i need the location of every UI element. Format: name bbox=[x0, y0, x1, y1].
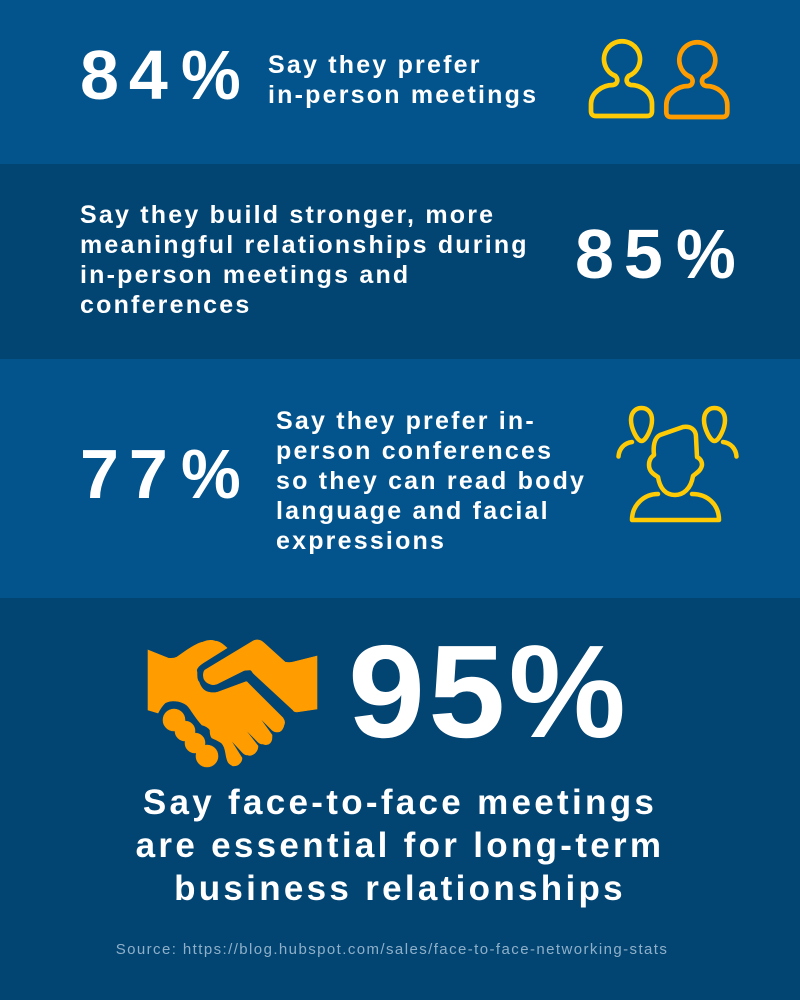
stat number 85% bbox=[575, 215, 736, 293]
icon: person with two others bbox=[616, 406, 739, 522]
text: face-to-face essential: Say face-to-face meetings bbox=[143, 783, 657, 822]
stat number 84%: % bbox=[181, 36, 241, 114]
text: prefer in-person meetings: in-person meetings bbox=[268, 81, 538, 109]
stat number 95% bbox=[348, 618, 626, 765]
text: prefer in-person meetings bbox=[268, 51, 538, 109]
text: stronger relationships bbox=[80, 201, 529, 319]
stat number 95%: 95 bbox=[348, 618, 508, 765]
text: body language: Say they prefer in- bbox=[276, 407, 536, 435]
source note: Source: https://blog.hubspot.com/sales/face-to-face-networking-stats bbox=[116, 941, 668, 958]
stat number 77% bbox=[80, 435, 241, 513]
panel: 95% stat bbox=[0, 598, 800, 1000]
text: stronger relationships: meaningful relationships during bbox=[80, 231, 529, 259]
stat number 84% bbox=[80, 36, 241, 114]
stat number 77%: % bbox=[181, 435, 241, 513]
text: face-to-face essential bbox=[136, 783, 664, 908]
panel: 85% stat bbox=[0, 164, 800, 359]
text: body language: person conferences bbox=[276, 437, 553, 465]
text: body language bbox=[276, 407, 586, 555]
text: stronger relationships: conferences bbox=[80, 291, 252, 319]
text: body language: expressions bbox=[276, 527, 446, 555]
stat number 85%: % bbox=[676, 215, 736, 293]
text: stronger relationships: Say they build stronger, more bbox=[80, 201, 495, 229]
icon: two people bbox=[588, 38, 730, 120]
icon: handshake bbox=[148, 640, 318, 768]
text: face-to-face essential: business relationships bbox=[174, 869, 626, 908]
stat number 84%: 84 bbox=[80, 36, 178, 114]
text: prefer in-person meetings: Say they prefer bbox=[268, 51, 482, 79]
text: body language: so they can read body bbox=[276, 467, 586, 495]
panel: 84% stat bbox=[0, 0, 800, 164]
stat number 85%: 85 bbox=[575, 215, 673, 293]
stat number 77%: 77 bbox=[80, 435, 178, 513]
text: stronger relationships: in-person meetings and bbox=[80, 261, 410, 289]
text: body language: language and facial bbox=[276, 497, 550, 525]
text: face-to-face essential: are essential for long-term bbox=[136, 826, 664, 865]
stat number 95%: % bbox=[508, 618, 626, 765]
panel: 77% stat bbox=[0, 359, 800, 598]
